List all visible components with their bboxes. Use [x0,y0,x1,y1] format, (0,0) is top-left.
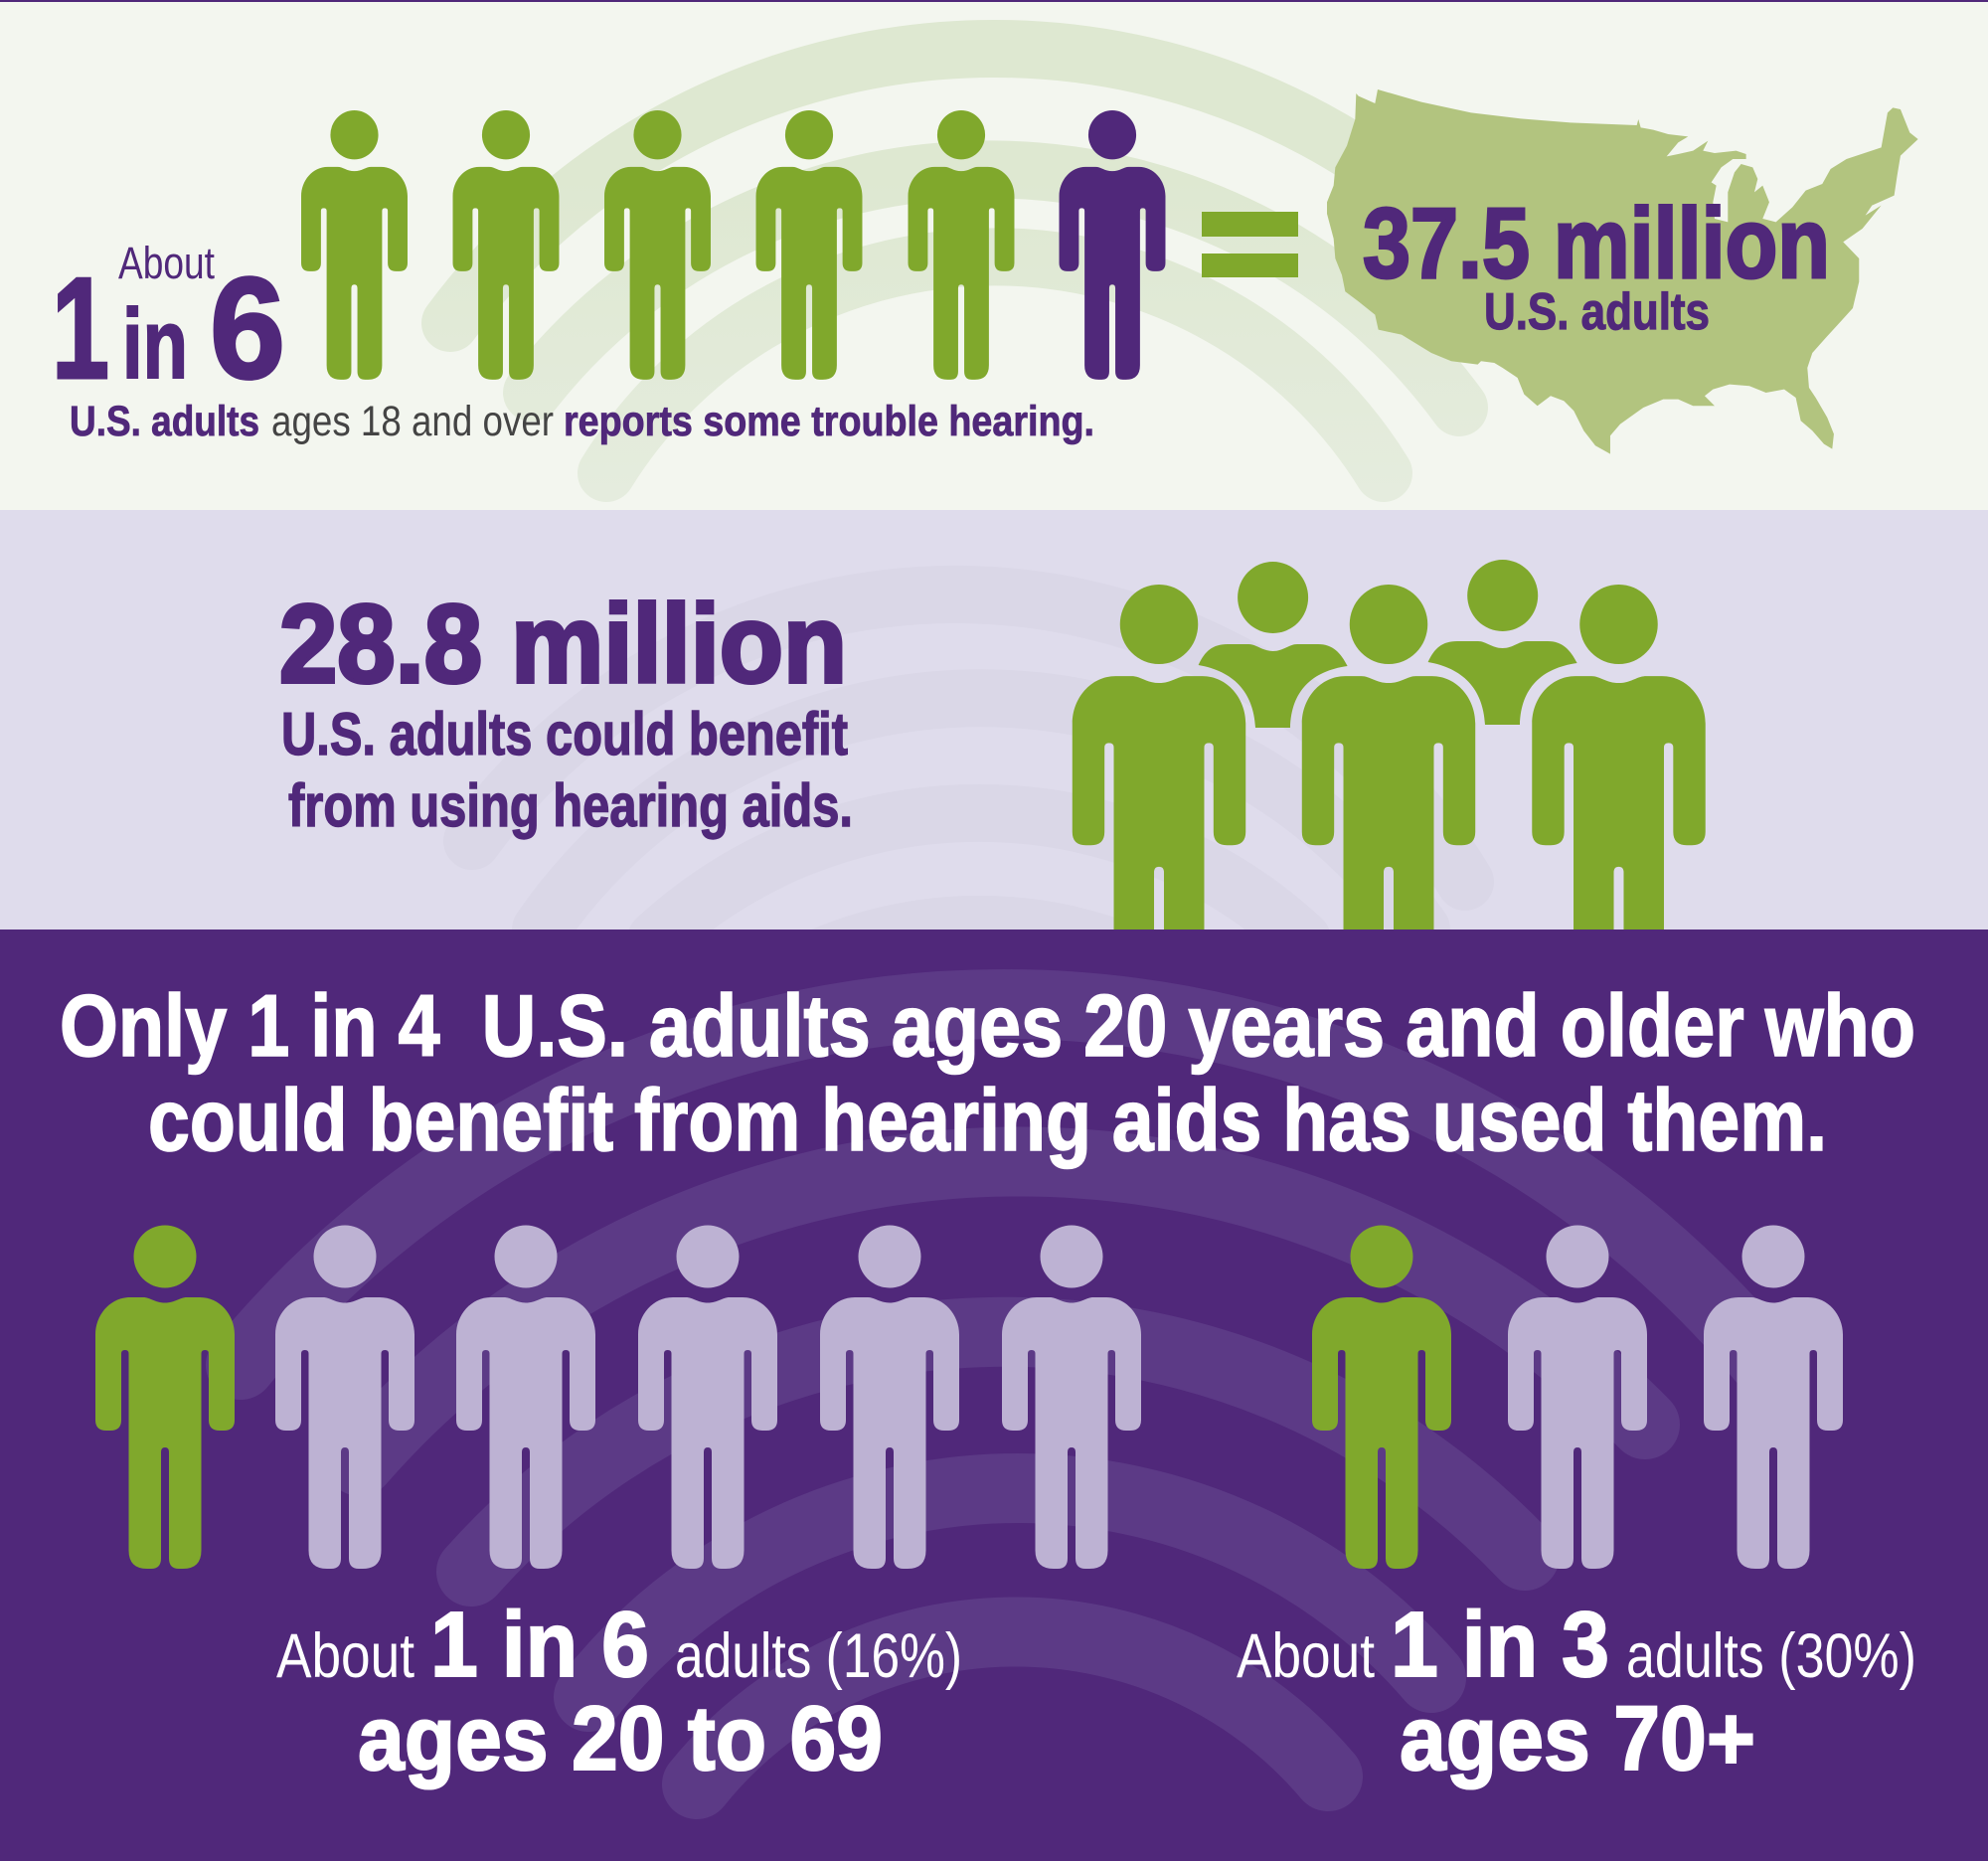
text: ages 70+ stat: 1 in 3 [1391,1593,1609,1696]
text: 28.8 million could benefit: 28.8 million [279,583,847,706]
text: ages 70+ stat: About [1237,1621,1375,1691]
icon: one green person of three [1312,1225,1451,1569]
heading: only 1 in 4 [60,976,1915,1169]
text: 1 in 6: in [122,288,188,399]
text: 37.5 million U.S. adults [1363,188,1830,341]
text: trouble hearing caption: U.S. adults [70,398,259,445]
text: trouble hearing caption: reports some trouble hearing. [564,398,1094,445]
map: United States [1327,89,1918,454]
text: ages 20 to 69 stat: adults (16%) [675,1621,962,1691]
panel: 1 in 6 U.S. adults [0,0,1988,510]
text: ages 20 to 69 stat: About [276,1621,414,1691]
text: 28.8 million could benefit [279,583,853,839]
text: ages 70+ stat: adults (30%) [1626,1621,1916,1691]
icon: equals sign [1202,212,1298,277]
text: 37.5 million U.S. adults: U.S. adults [1484,283,1710,341]
text: 1 in 6: About [118,238,215,288]
text: trouble hearing caption: ages 18 and over [271,398,554,445]
icon: five green people [301,110,1014,380]
icon: five lavender people [275,1225,1141,1569]
text: 1 in 6: 6 [210,248,285,409]
text: ages 20 to 69 stat: 1 in 6 [430,1593,649,1696]
icon: group of five people [1073,560,1706,1021]
text: 28.8 million could benefit: U.S. adults could benefit [281,701,848,767]
icon: two lavender people [1508,1225,1843,1569]
text: ages 70+ stat: ages 70+ [1400,1688,1755,1789]
icon: one purple person [1060,110,1165,380]
panel: only 1 in 4 have used hearing aids [0,930,1988,1861]
text: ages 70+ stat [1237,1593,1916,1789]
icon: one green person of six [95,1225,235,1569]
text: trouble hearing caption [70,398,1094,445]
text: ages 20 to 69 stat [276,1593,962,1789]
text: ages 20 to 69 stat: ages 20 to 69 [358,1688,883,1789]
text: 37.5 million U.S. adults: 37.5 million [1363,188,1830,299]
text: 1 in 6: 1 [52,248,109,409]
text: 28.8 million could benefit: from using hearing aids. [288,772,853,839]
panel: 28.8 million [0,510,1988,1021]
text: 1 in 6 [52,238,285,409]
